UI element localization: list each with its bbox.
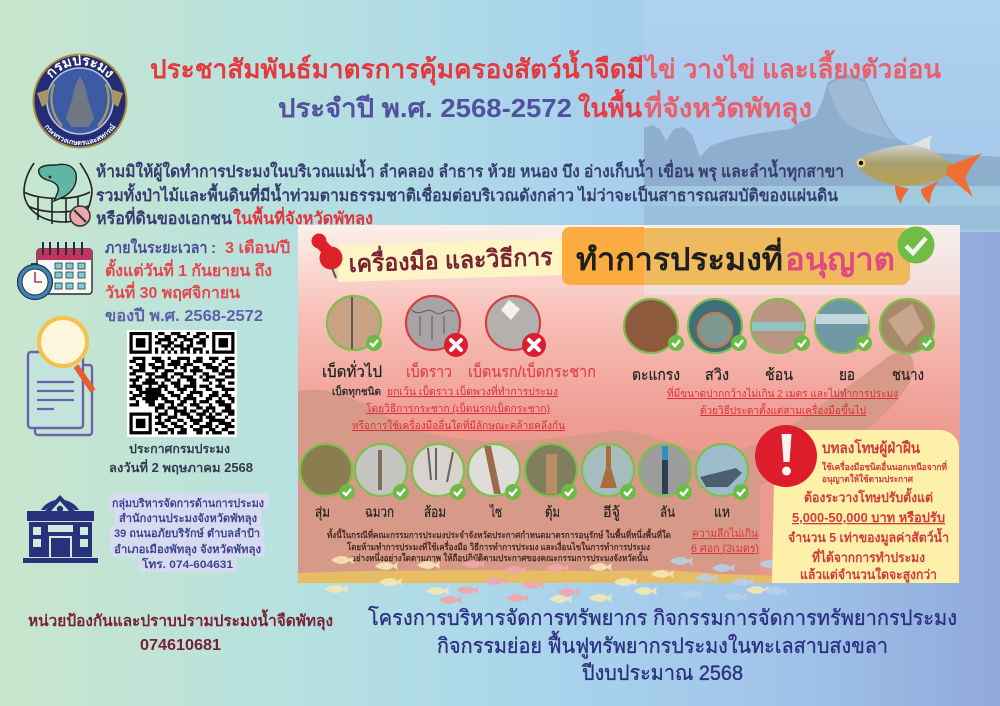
logo: department of fisheries seal: กระทรวงเกษตรและสหกรณ์: [44, 122, 116, 146]
time period text: [105, 238, 290, 325]
note: provincial committee conditions: โดยห้ามทำการประมงที่ใช้เครื่องมือ วิธีการทำการประมง และเงื่อนไขในการทำการประมง: [346, 540, 650, 552]
note: provincial committee conditions: ทั้งนี้ในกรณีที่คณะกรรมการประมงประจำจังหวัดประกาศกำหนดมาตรการอนุรักษ์ ในพื้นที่หนึ่งพื้นที่ใด: [327, 528, 671, 541]
check badges: bottom row: [339, 484, 749, 500]
labels: top row right: ตะแกรง: [632, 367, 680, 384]
heading band: tools and methods: เครื่องมือ และวิธีการ: [348, 239, 553, 278]
light overlay on the right of panel: [644, 225, 960, 295]
penalty box: แล้วแต่จำนวนใดจะสูงกว่า: [800, 566, 937, 583]
labels: top row left: เบ็ดทั่วไป: [322, 360, 382, 381]
labels: top row right: ชนาง: [892, 367, 924, 384]
logo: department of fisheries seal: กรมประมง: [47, 54, 114, 78]
note: provincial committee conditions: [327, 528, 671, 563]
ban text block: [96, 159, 844, 229]
heading box: permitted fishing: อนุญาต: [785, 242, 895, 279]
time period text: ของปี พ.ศ. 2568-2572: [105, 306, 263, 325]
time period text: ตั้งแต่วันที่ 1 กันยายน ถึง: [105, 258, 272, 280]
QR caption: [109, 442, 253, 475]
icon: documents with magnifier: [28, 318, 93, 435]
ban text block: ในพื้นที่จังหวัดพัทลุง: [233, 206, 373, 229]
labels: bottom row: ส้อม: [424, 504, 446, 521]
office address: [108, 493, 269, 572]
note: depth limit: ความลึกไม่เกิน: [692, 527, 758, 540]
penalty box: ใช้เครื่องมือชนิดอื่นนอกเหนือจากที่: [822, 460, 947, 472]
panel brown wave shapes: [298, 351, 914, 583]
lake and mountain photo: [644, 0, 1000, 232]
footer left: suppression unit: หน่วยป้องกันและปราบปรามประมงน้ำจืดพัทลุง: [28, 609, 333, 631]
panel: permitted fishing tools background: [298, 225, 960, 583]
penalty box: ที่ได้จากการทำประมง: [812, 548, 925, 565]
note: prohibited hooks: โดยวิธีการกระชาก (เบ็ดนรก/เบ็ดกระชาก): [366, 401, 550, 415]
heading band: tools and methods: [312, 234, 562, 282]
title: ในพื้น: [578, 88, 642, 123]
footer right: project name: [368, 606, 957, 685]
title: ไข่ วางไข่ และเลี้ยงตัวอ่อน: [642, 49, 941, 84]
title: [150, 49, 941, 125]
footer left: suppression unit: 074610681: [140, 637, 221, 654]
tool circles: bottom row: [300, 444, 748, 496]
QR caption: ประกาศกรมประมง: [129, 442, 230, 456]
note: depth limit: 6 ศอก (3เมตร): [691, 543, 759, 555]
ban text block: รวมทั้งป่าไม้และพื้นดินที่มีน้ำท่วมตามธรรมชาติเชื่อมต่อบริเวณดังกล่าว ไม่ว่าจะเป็นสาธารณสมบัติของแผ่นดิน: [96, 183, 839, 205]
tool circles: top row right: [624, 299, 934, 353]
office address: 39 ถนนอภัยบริรักษ์ ตำบลลำป้า: [114, 527, 260, 540]
labels: top row left: เบ็ดนรก/เบ็ดกระชาก: [468, 361, 596, 381]
labels: top row right: สวิง: [705, 367, 729, 384]
labels: bottom row: ลัน: [660, 505, 675, 521]
QR code: [127, 330, 237, 437]
labels: top row left: [322, 360, 596, 381]
penalty box: 5,000-50,000 บาท หรือปรับ: [792, 510, 945, 525]
icon: calendar and stopwatch: [18, 242, 92, 300]
icon: government office building: [23, 495, 98, 563]
labels: bottom row: แห: [714, 505, 730, 521]
office address: อำเภอเมืองพัทลุง จังหวัดพัทลุง: [114, 543, 261, 557]
labels: bottom row: ไซ: [489, 503, 502, 521]
note: mouth width limit: ด้วยวิธีประดาตั้งแต่สามเครื่องมือขึ้นไป: [700, 403, 866, 417]
tool circles: top row left: [327, 296, 546, 357]
footer right: project name: ปีงบประมาณ 2568: [581, 662, 743, 685]
penalty box: อนุญาตให้ใช้ตามประกาศ: [822, 473, 913, 485]
labels: bottom row: [315, 503, 730, 521]
time period text: ภายในระยะเวลา :: [105, 238, 216, 257]
heading box: permitted fishing: ทำการประมงที่: [576, 237, 783, 277]
title: ที่จังหวัดพัทลุง: [644, 89, 812, 125]
note: provincial committee conditions: อย่างหนึ่งอย่างใดตามภาพ ให้ถือปฏิบัติตามประกาศของคณะกรรมการประมงจังหวัดนั้น: [351, 551, 649, 563]
title: ประจำปี พ.ศ. 2568-2572: [278, 93, 572, 123]
labels: bottom row: ตุ้ม: [545, 504, 560, 521]
check badges: top row right: [668, 335, 935, 351]
ban text block: หรือที่ดินของเอกชน: [96, 206, 233, 228]
school of small fish: [325, 556, 787, 604]
office address: สำนักงานประมงจังหวัดพัทลุง: [119, 512, 257, 526]
logo: department of fisheries seal: [32, 54, 128, 148]
footer left: suppression unit: [28, 609, 333, 654]
yellow sand band: [298, 570, 780, 583]
ban text block: ห้ามมิให้ผู้ใดทำการประมงในบริเวณแม่น้ำ ลำคลอง ลำธาร ห้วย หนอง บึง อ่างเก็บน้ำ เขื่อน พรุ และลำน้ำทุกสาขา: [96, 159, 844, 183]
labels: bottom row: สุ่ม: [315, 505, 330, 521]
office address: โทร. 074-604631: [141, 557, 233, 571]
note: mouth width limit: [667, 386, 898, 417]
note: prohibited hooks: เบ็ดทุกชนิด: [332, 384, 381, 399]
note: prohibited hooks: หรือการใช้เครื่องมืออื่นใดที่มีลักษณะคล้ายคลึงกัน: [352, 418, 565, 432]
time period text: 3 เดือน/ปี: [225, 238, 290, 257]
footer right: project name: กิจกรรมย่อย ฟื้นฟูทรัพยากรประมงในทะเลสาบสงขลา: [437, 631, 888, 659]
penalty box: ต้องระวางโทษปรับตั้งแต่: [804, 487, 933, 505]
title: ประชาสัมพันธ์มาตรการคุ้มครองสัตว์น้ำจืดมี: [150, 49, 644, 86]
note: prohibited hooks: ยกเว้น เบ็ดราว เบ็ดพวงที่ทำการประมง: [387, 384, 558, 398]
note: depth limit: [691, 527, 759, 555]
QR caption: ลงวันที่ 2 พฤษภาคม 2568: [109, 459, 253, 475]
office address: กลุ่มบริหารจัดการด้านการประมง: [112, 497, 264, 511]
time period text: วันที่ 30 พฤศจิกายน: [105, 281, 240, 302]
penalty box: [755, 425, 959, 583]
labels: top row right: [632, 367, 924, 384]
labels: top row left: เบ็ดราว: [406, 361, 452, 381]
labels: bottom row: อีจู้: [603, 504, 620, 521]
fish photo: [855, 135, 982, 204]
labels: top row right: ช้อน: [765, 367, 793, 384]
labels: bottom row: ฉมวก: [365, 505, 394, 521]
note: mouth width limit: ที่มีขนาดปากกว้างไม่เกิน 2 เมตร และไม่ทำการประมง: [667, 386, 898, 400]
note: prohibited hooks: [332, 384, 565, 432]
penalty box: จำนวน 5 เท่าของมูลค่าสัตว์น้ำ: [788, 527, 949, 546]
heading box: permitted fishing: [562, 226, 934, 285]
penalty box: บทลงโทษผู้ฝ่าฝืน: [822, 438, 921, 458]
icon: fish in net with prohibition sign: [24, 163, 92, 226]
footer right: project name: โครงการบริหารจัดการทรัพยากร กิจกรรมการจัดการทรัพยากรประมง: [368, 606, 957, 630]
labels: top row right: ยอ: [839, 367, 855, 384]
